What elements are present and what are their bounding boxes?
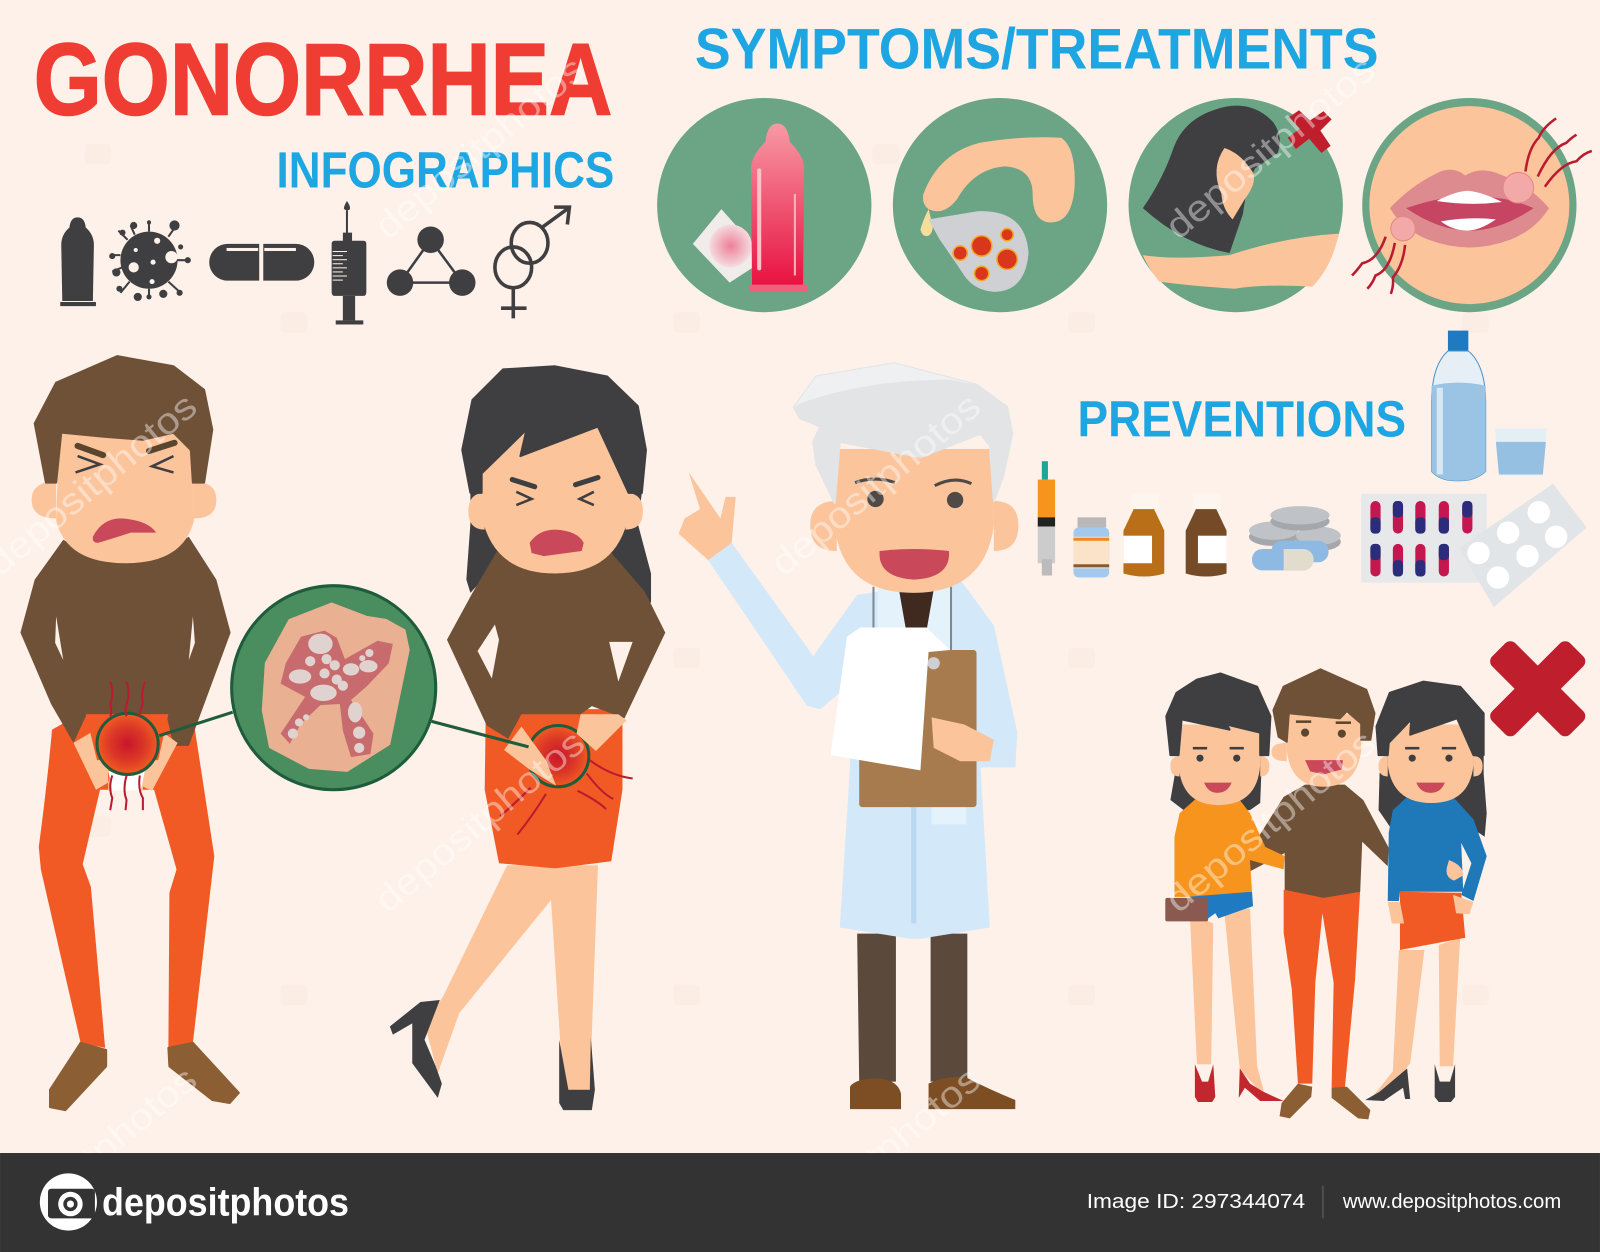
figure: woman in pain [390,366,665,1110]
subtitle: INFOGRAPHICS [277,142,614,199]
man hands and cloth [73,733,178,791]
woman skirt [485,709,622,868]
heading: preventions: PREVENTIONS [1078,391,1406,448]
left girl mouth [1204,783,1232,793]
man heat lines [110,682,145,810]
man face [78,443,175,455]
figure: man in pain [20,356,239,1110]
coat pocket [932,807,966,824]
panel: prevention items [1038,331,1587,607]
man ears [32,482,216,518]
woman legs [425,865,598,1090]
doctor coat [708,543,1017,939]
right girl skirt [1400,892,1465,950]
doctor hair [794,363,1012,503]
left girl legs [1190,908,1265,1097]
woman heels [390,1000,595,1110]
right girl mouth [1416,783,1445,793]
right girl back hair [1379,755,1487,837]
amber bottle [1123,494,1164,577]
woman arm gaps [478,624,633,682]
right girl hands [1388,860,1473,923]
stock watermarks: depositphotos [1157,722,1383,920]
man legs [39,710,214,1048]
clipboard clip [928,657,940,669]
doctor shoes [850,1076,1015,1109]
circle: avoid unsafe contact [1129,98,1343,312]
coat centre seam [911,806,916,923]
stethoscope cords [873,587,951,653]
icon: condom [60,217,96,306]
centre man eyes [1296,720,1351,738]
right girl heels [1365,1064,1455,1102]
small vial [1073,517,1109,578]
figure group: three people with red cross [1165,638,1588,1119]
right girl ears [1379,756,1483,777]
title: GONORRHEA [34,22,612,136]
clipboard [859,650,977,807]
doctor dark undershirt [899,590,934,631]
right girl eyes and brows [1405,747,1456,762]
woman mouth [530,530,584,556]
man sweater [20,537,231,746]
syringe orange [1038,461,1055,575]
capsule blister [1361,494,1487,583]
tablet blister [1459,484,1587,607]
centre man mouth [1305,760,1343,774]
right girl hair [1377,682,1484,755]
doctor mouth [879,549,949,580]
icon: big red cross [1487,638,1588,739]
left girl shorts [1185,892,1253,918]
doctor raised hand [679,472,736,560]
water bottle [1432,331,1486,481]
left girl head [1179,724,1260,805]
man shoes [50,1043,239,1110]
icon: molecule [387,227,476,296]
icon: gender symbols [495,207,569,318]
woman ears [468,493,643,530]
centre man sweater [1247,785,1389,898]
left girl sweater [1174,798,1285,897]
left girl back hair [1170,755,1261,810]
icon: capsule [209,244,314,281]
man arm gaps [55,616,195,660]
left girl hair [1166,673,1270,755]
woman inflammation [528,725,589,787]
centre man pants [1284,890,1360,1088]
connector right [432,721,529,747]
footer logo mark [40,1173,97,1231]
doctor trousers [857,934,967,1082]
stock watermarks: depositphotos [367,48,592,247]
stock watermarks: depositphotos [367,722,592,920]
icon: virus [109,220,191,301]
doctor ears [810,501,1018,551]
woman back hair [466,493,651,642]
connector left [159,712,233,736]
man mouth [93,518,156,543]
icon row [60,201,569,324]
left girl heels [1195,1064,1284,1102]
footer bar [0,1153,1600,1252]
right girl head [1388,724,1473,803]
icon: syringe [332,201,366,324]
man groin inflammation [86,713,168,774]
man cloth [108,770,145,791]
stock watermarks: depositphotos [1157,48,1383,247]
wallet [1165,898,1208,921]
woman hands [504,714,627,786]
man hair [35,356,212,483]
man head [56,429,194,563]
man eyes [76,456,173,472]
heading: symptoms and treatments: SYMPTOMS/TREATMENTS [695,17,1379,81]
woman sweater [447,548,665,739]
circle: mouth sores [1352,98,1592,312]
brown bottle [1186,494,1227,577]
circle: discharge with magnifier [893,98,1107,312]
stock watermarks: depositphotos [762,385,988,584]
right girl legs [1372,938,1460,1097]
footer logo text: depositphotos [102,1181,349,1224]
left girl eyes and brows [1193,747,1244,762]
doctor head [835,449,994,593]
centre man head [1287,714,1361,787]
left girl ears [1170,756,1269,777]
icon: red cross [1288,110,1332,153]
doctor eyes and brows [855,479,971,508]
stock watermarks: depositphotos [762,1058,988,1252]
woman pain lines [500,760,633,835]
footer image id: Image ID: 297344074 [1087,1191,1305,1213]
woman hair [462,366,646,493]
tablets and capsules [1249,506,1341,570]
woman brows [512,478,598,487]
centre man ears [1271,743,1287,761]
centre man hair [1273,669,1374,742]
doctor hair highlight [794,363,977,407]
magnified lesion [232,586,436,790]
footer url: www.depositphotos.com [1342,1191,1561,1213]
faint watermark camera marks [85,144,1489,1005]
paper sheet [831,628,950,770]
centre man shoes [1280,1084,1370,1119]
doctor collar and shirt [878,582,951,653]
panel: symptoms and treatment circles [657,98,1592,312]
figure: doctor [679,363,1018,1109]
woman eyes [516,492,594,505]
water glass [1495,429,1547,475]
doctor hand [932,717,994,761]
woman head [482,413,629,573]
right girl sweater [1388,797,1487,901]
circle: condom and packet [657,98,871,312]
